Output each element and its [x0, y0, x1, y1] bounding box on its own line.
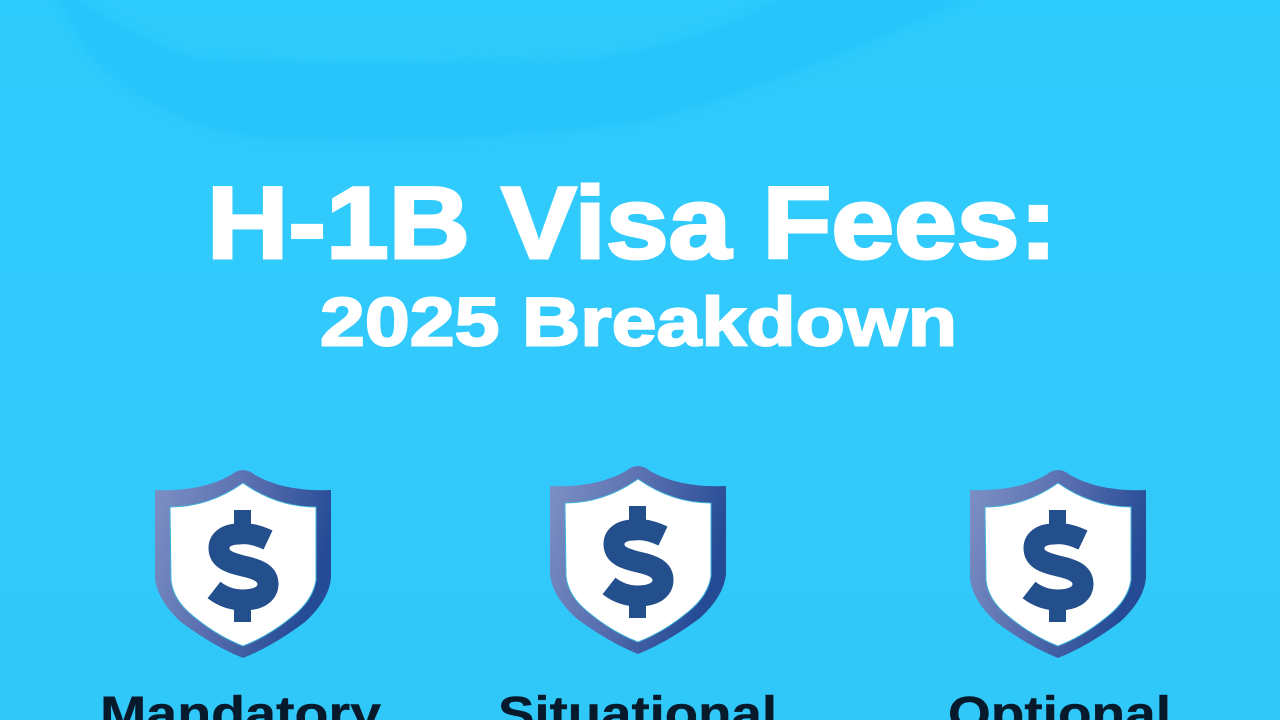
subtitle: 2025 Breakdown	[320, 284, 957, 360]
column: optional	[948, 470, 1171, 720]
title: H-1B Visa Fees:	[207, 166, 1057, 280]
column: situational	[498, 466, 777, 720]
icon: shield with dollar sign	[970, 470, 1146, 658]
column: mandatory	[100, 470, 381, 720]
icon: shield with dollar sign	[550, 466, 726, 654]
icon: shield with dollar sign	[155, 470, 331, 658]
